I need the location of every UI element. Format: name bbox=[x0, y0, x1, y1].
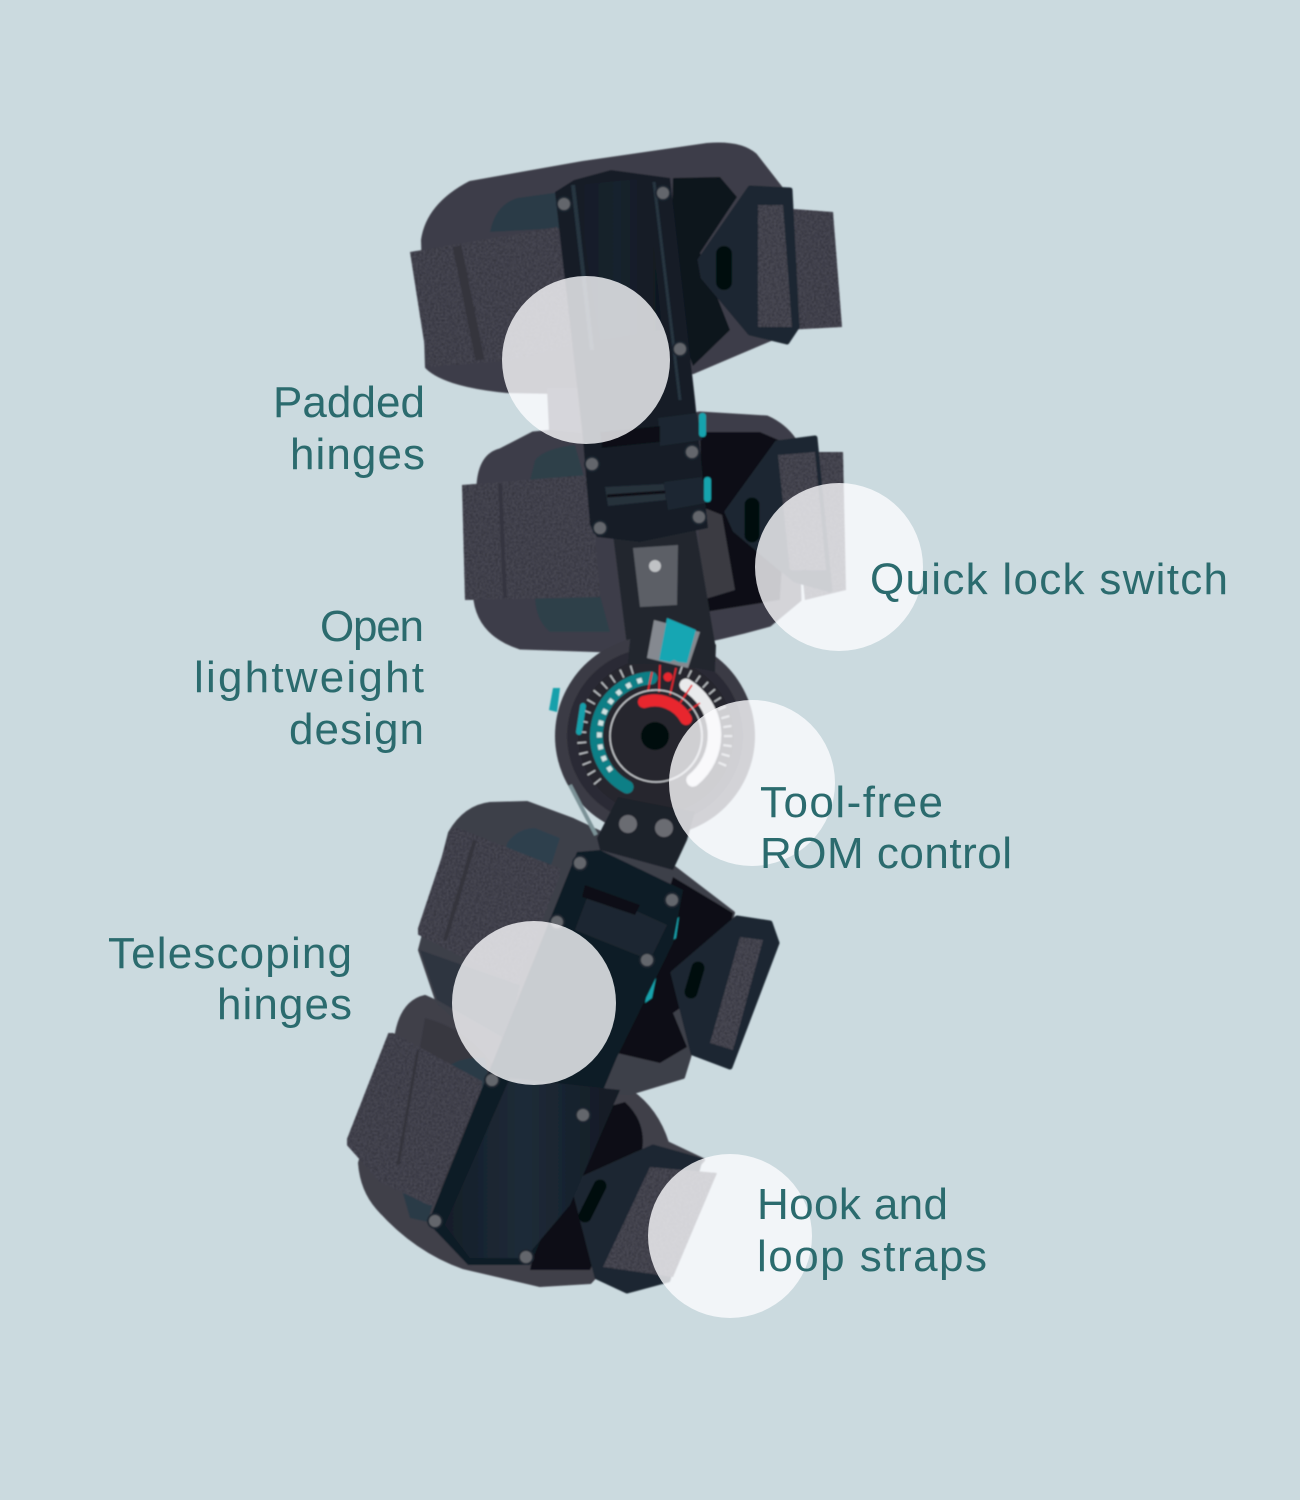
highlight circle: padded hinges bbox=[502, 276, 670, 444]
dial white scale bbox=[686, 685, 714, 780]
label: tool-free ROM control: Tool-free bbox=[760, 778, 943, 827]
lower hinge bar bbox=[428, 850, 683, 1265]
dial red scale bbox=[644, 700, 686, 719]
teal side button bbox=[549, 688, 560, 712]
highlight circle: telescoping hinges bbox=[452, 921, 616, 1085]
teal side tabs bbox=[645, 413, 711, 1003]
label: open lightweight design bbox=[194, 602, 424, 754]
upper calf cuff bbox=[462, 413, 846, 652]
label: padded hinges: hinges bbox=[290, 430, 425, 479]
lock switch housing bbox=[647, 620, 700, 668]
dial tick marks bbox=[582, 668, 640, 782]
label: open lightweight design: design bbox=[289, 705, 424, 754]
label: quick lock switch: Quick lock switch bbox=[870, 555, 1228, 604]
label: hook and loop straps: loop straps bbox=[757, 1232, 987, 1281]
label: padded hinges: Padded bbox=[273, 378, 425, 427]
hinge cover over dial bbox=[628, 610, 716, 672]
label: telescoping hinges: Telescoping bbox=[108, 929, 352, 978]
dial inner ring bbox=[610, 690, 702, 782]
dial centre hole bbox=[641, 722, 669, 750]
lower calf cuff bbox=[347, 997, 717, 1291]
upper thigh cuff bbox=[410, 144, 842, 434]
highlight circle: straps bbox=[648, 1154, 812, 1318]
label: hook and loop straps: Hook and bbox=[757, 1180, 948, 1229]
highlight circle: ROM control bbox=[669, 700, 835, 866]
range of motion dial bbox=[549, 610, 755, 836]
teal dial marker bbox=[579, 706, 583, 732]
upper hinge bar bbox=[555, 170, 716, 680]
knee brace illustration bbox=[347, 144, 846, 1291]
hinge rivets bbox=[428, 186, 706, 1264]
label: tool-free ROM control: ROM control bbox=[760, 829, 1012, 878]
label: open lightweight design: lightweight bbox=[194, 653, 424, 702]
label: tool-free ROM control bbox=[760, 778, 1012, 878]
label: telescoping hinges: hinges bbox=[217, 980, 352, 1029]
label: telescoping hinges bbox=[108, 929, 352, 1029]
lower hinge connector bbox=[570, 785, 695, 870]
highlight circle: quick lock switch bbox=[755, 483, 923, 651]
label: open lightweight design: Open bbox=[320, 602, 424, 651]
lower thigh cuff bbox=[418, 803, 777, 1093]
label: hook and loop straps bbox=[757, 1180, 987, 1281]
dial teal scale bbox=[596, 678, 651, 787]
lock switch bbox=[659, 618, 696, 663]
label: padded hinges bbox=[273, 378, 425, 479]
